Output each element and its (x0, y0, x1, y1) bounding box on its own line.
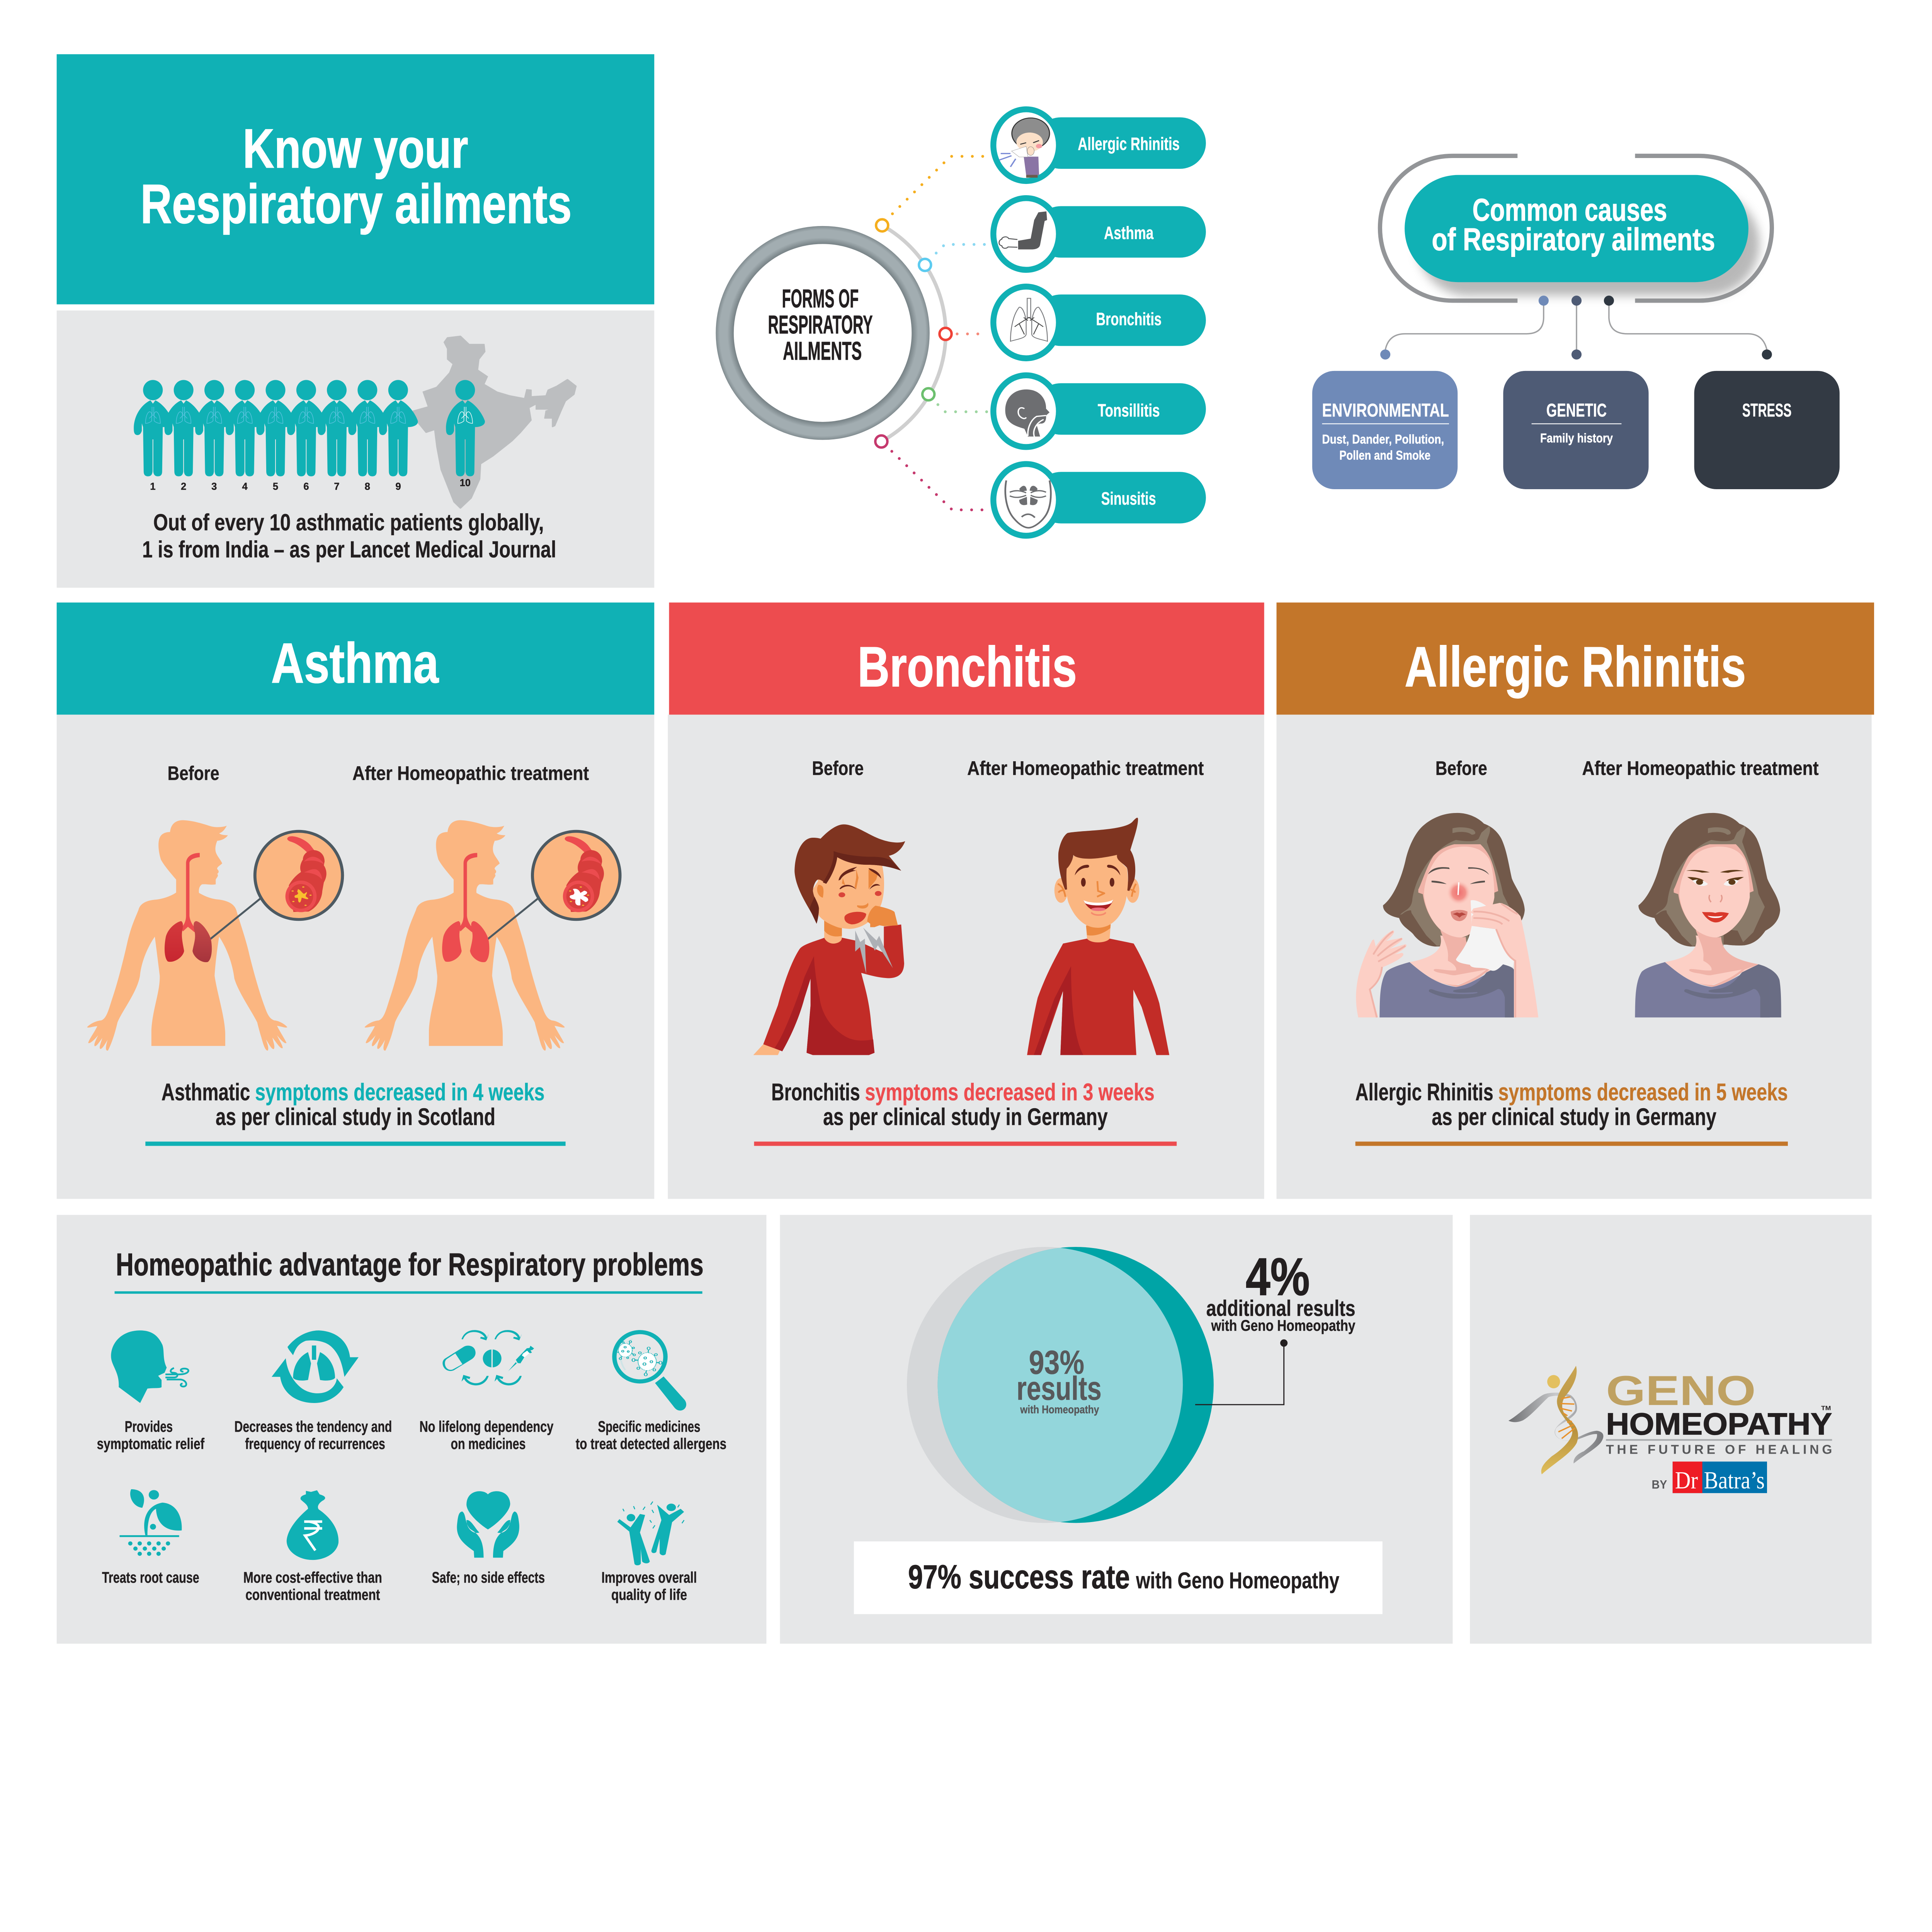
advantage captions: More cost-effective than (243, 1569, 382, 1586)
heading pill (1405, 175, 1748, 282)
advantage captions: to treat detected allergens (576, 1435, 726, 1452)
pictogram numbers: 1 (150, 481, 156, 492)
advantage captions: Decreases the tendency and (235, 1418, 392, 1435)
icon: plant and roots (120, 1489, 182, 1556)
icon: magnifier with allergens (612, 1330, 686, 1410)
title text (141, 118, 572, 235)
icon: lungs (1010, 298, 1048, 341)
advantage captions: symptomatic relief (97, 1435, 205, 1452)
icon: rupee money bag (287, 1490, 338, 1560)
icon: face with sinuses (1005, 480, 1051, 528)
centre ring with label: RESPIRATORY (768, 310, 873, 339)
Bronchitis study text: as per clinical study in Germany (823, 1104, 1108, 1130)
logo: wordmark: TM (1821, 1405, 1831, 1412)
title text: Respiratory ailments (141, 173, 572, 235)
pictogram numbers: 5 (273, 481, 278, 492)
before and after labels: After Homeopathic treatment (1582, 757, 1819, 779)
item: Sinusitis (990, 461, 1206, 539)
Allergic Rhinitis header (1277, 602, 1874, 714)
panel: Allergic Rhinitis (1277, 602, 1874, 1199)
panel: India statistic (57, 311, 654, 588)
callout: 4% additional results: with Geno Homeopathy (1211, 1317, 1355, 1334)
heading pill: of Respiratory ailments (1432, 222, 1715, 257)
chart: overlapping circles (907, 1247, 1214, 1523)
cause box: stress: STRESS (1742, 400, 1791, 421)
India statistic text: 1 is from India – as per Lancet Medical Journal (142, 536, 556, 562)
advantage heading: Homeopathic advantage for Respiratory problems (116, 1247, 704, 1282)
icon: two happy people (617, 1502, 684, 1565)
Allergic Rhinitis study text: Allergic Rhinitis (1355, 1079, 1493, 1106)
item: Asthma: Asthma (1104, 223, 1154, 243)
advantage captions: conventional treatment (245, 1587, 380, 1604)
chart label: 93% (1017, 1344, 1102, 1416)
icon: sneezing woman (999, 118, 1049, 178)
icon: inhaler (999, 211, 1047, 249)
Asthma study text: Asthmatic (162, 1079, 250, 1106)
logo: wordmark: GENO (1606, 1367, 1756, 1414)
Allergic Rhinitis study text (1355, 1079, 1788, 1130)
Asthma header: Asthma (271, 632, 439, 695)
logo: Dr Batra's badge: Batra’s (1704, 1466, 1765, 1494)
cause box: environmental: Dust, Dander, Pollution, (1322, 432, 1444, 447)
pictogram numbers: 4 (242, 481, 248, 492)
item: Bronchitis (990, 284, 1206, 361)
Asthma study text (162, 1079, 544, 1130)
advantage captions: Specific medicines (598, 1418, 701, 1435)
panel: logo (1470, 1215, 1872, 1644)
advantage captions: Provides (125, 1418, 173, 1435)
Bronchitis study text: symptoms decreased in 3 weeks (865, 1079, 1155, 1106)
advantage captions: No lifelong dependency (419, 1418, 553, 1435)
advantage captions: Improves overall (601, 1569, 697, 1586)
India statistic text: Out of every 10 asthmatic patients globally, (153, 509, 544, 535)
illustration: woman sneezing (1356, 813, 1538, 1017)
advantage captions (97, 1418, 726, 1604)
cause box: genetic (1503, 371, 1649, 489)
cause box: environmental: ENVIRONMENTAL (1322, 400, 1449, 421)
cause box: genetic: Family history (1540, 431, 1613, 446)
item: Tonsillitis (990, 372, 1206, 450)
chart label: 93%: 93% (1029, 1344, 1084, 1381)
cause box: stress (1694, 371, 1840, 489)
Allergic Rhinitis header: Allergic Rhinitis (1405, 635, 1746, 699)
panel: success rate (780, 1215, 1453, 1644)
outer arc (881, 225, 946, 442)
illustration: boy coughing (753, 825, 905, 1055)
icon: hands holding heart (457, 1491, 519, 1558)
panel: Bronchitis (668, 602, 1264, 1199)
Bronchitis header: Bronchitis (857, 635, 1077, 699)
advantage captions: quality of life (611, 1587, 687, 1604)
before and after labels: After Homeopathic treatment (352, 762, 589, 784)
icon: pills and syringe cycle (442, 1330, 534, 1385)
Allergic Rhinitis study text: as per clinical study in Germany (1432, 1104, 1716, 1130)
title panel (57, 54, 654, 304)
item: Allergic Rhinitis (990, 106, 1206, 184)
title text: Know your (243, 118, 468, 180)
illustration: woman smiling (1635, 813, 1781, 1017)
pictogram numbers: 8 (365, 481, 370, 492)
before and after labels (812, 757, 1204, 779)
logo: wordmark (1606, 1367, 1832, 1492)
advantage captions: frequency of recurrences (245, 1435, 385, 1452)
Bronchitis study text: Bronchitis (771, 1079, 860, 1106)
logo: Dr Batra's badge (1673, 1462, 1767, 1494)
people pictogram: 10 figures (134, 380, 485, 476)
outer rounded frame (1380, 156, 1772, 301)
success rate box: 97% success rate (908, 1558, 1130, 1595)
cause box: environmental (1312, 371, 1458, 489)
item: Sinusitis: Sinusitis (1101, 488, 1156, 509)
connector dots (1380, 296, 1772, 359)
arc nodes (875, 219, 952, 447)
pictogram numbers: 2 (181, 481, 186, 492)
item: Asthma (990, 195, 1206, 273)
Asthma header (57, 602, 654, 714)
item: Bronchitis: Bronchitis (1096, 309, 1162, 329)
illustration: boy smiling (1027, 818, 1169, 1055)
before and after labels (1435, 757, 1819, 779)
before and after labels: Before (168, 762, 219, 784)
connector lines (1385, 303, 1767, 354)
centre ring with label: AILMENTS (783, 337, 862, 366)
icon: head profile with throat (1005, 389, 1049, 438)
Allergic Rhinitis study text: symptoms decreased in 5 weeks (1498, 1079, 1788, 1106)
chart label: 93%: results (1017, 1370, 1102, 1407)
pictogram numbers (150, 478, 471, 492)
logo: DNA figure (1509, 1366, 1603, 1475)
before and after labels: Before (1435, 757, 1487, 779)
item: Allergic Rhinitis: Allergic Rhinitis (1078, 134, 1180, 154)
pill shadow (1417, 192, 1760, 296)
logo: wordmark: BY (1652, 1478, 1667, 1492)
item: Tonsillitis: Tonsillitis (1098, 400, 1160, 420)
logo: wordmark: THE FUTURE OF HEALING (1606, 1443, 1832, 1457)
logo: wordmark: HOMEOPATHY (1606, 1407, 1832, 1441)
callout: 4% additional results: additional results (1206, 1296, 1355, 1321)
callout: 4% additional results (1195, 1247, 1355, 1405)
pictogram numbers: 3 (211, 481, 217, 492)
diagram: common causes (1312, 156, 1840, 489)
illustration: body after treatment (364, 820, 622, 1051)
callout: 4% additional results: 4% (1246, 1247, 1310, 1306)
success rate box (854, 1541, 1383, 1614)
panel: homeopathic advantage (57, 1215, 766, 1644)
success rate box: with Geno Homeopathy (1136, 1568, 1339, 1593)
illustration: body before treatment (87, 820, 344, 1051)
before and after labels: Before (812, 757, 864, 779)
heading pill: Common causes (1473, 192, 1667, 228)
India statistic text (142, 509, 556, 562)
cause box: genetic: GENETIC (1546, 400, 1607, 421)
Bronchitis header (669, 602, 1264, 714)
before and after labels (168, 762, 589, 784)
pictogram numbers: 7 (334, 481, 340, 492)
pictogram numbers: 9 (396, 481, 401, 492)
diagram: forms of respiratory ailments (725, 106, 1206, 539)
advantage captions: Safe; no side effects (432, 1569, 545, 1586)
panel: Asthma (57, 602, 654, 1199)
chart label: 93%: with Homeopathy (1020, 1404, 1099, 1416)
advantage captions: on medicines (451, 1435, 526, 1452)
advantage captions: Treats root cause (102, 1569, 199, 1586)
centre ring with label: FORMS OF (782, 284, 859, 313)
pictogram numbers: 6 (303, 481, 309, 492)
dotted connectors (892, 156, 987, 510)
advantage heading (115, 1247, 704, 1294)
India map (413, 336, 576, 509)
icon: cycle with lungs (272, 1330, 359, 1403)
Bronchitis study text (771, 1079, 1155, 1130)
Asthma study text: symptoms decreased in 4 weeks (255, 1079, 544, 1106)
cause box: environmental: Pollen and Smoke (1339, 448, 1430, 463)
logo: Dr Batra's badge: Dr (1675, 1466, 1698, 1494)
before and after labels: After Homeopathic treatment (967, 757, 1204, 779)
pictogram numbers: 10 (460, 478, 471, 488)
Asthma study text: as per clinical study in Scotland (216, 1104, 495, 1130)
centre ring with label (725, 235, 921, 431)
icon: head breathing (111, 1330, 189, 1403)
